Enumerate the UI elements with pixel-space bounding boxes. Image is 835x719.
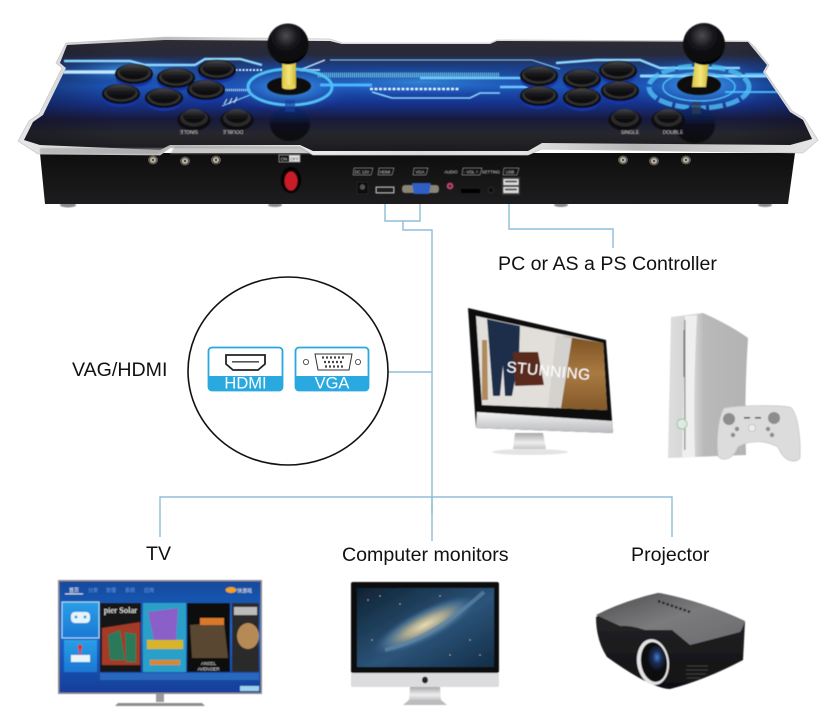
bezel shading on acrylic — [40, 146, 312, 154]
apple-style logo — [422, 677, 428, 683]
tv menu tiles — [62, 602, 99, 672]
button captions — [179, 128, 684, 136]
port labels: DC 12V — [355, 170, 370, 174]
label: VAG/HDMI: VAG/HDMI — [72, 359, 167, 381]
tv game covers — [100, 603, 259, 691]
left joystick — [267, 24, 311, 95]
VGA port card — [295, 348, 369, 392]
label: Computer monitors: Computer monitors — [342, 544, 509, 566]
monitor screen photo: STUNNING — [506, 359, 591, 384]
joystick rings — [248, 66, 749, 108]
tv frame — [58, 580, 262, 694]
monitor stand — [492, 433, 568, 455]
HDMI port card: HDMI — [224, 374, 267, 392]
projector body — [596, 593, 745, 689]
vent slots — [686, 666, 708, 678]
game controller — [717, 406, 800, 461]
power switch — [279, 155, 301, 193]
console body — [40, 153, 795, 204]
console feet — [60, 202, 772, 208]
port connectors — [357, 177, 520, 195]
monitor casing — [351, 582, 499, 673]
lens — [634, 637, 672, 687]
projector — [596, 593, 745, 689]
callout: HDMI and VGA ports circle — [188, 277, 388, 465]
HDMI port card — [208, 348, 283, 392]
acrylic top plate — [18, 37, 818, 155]
tv menu: 首页 — [69, 587, 79, 594]
port labels: USB — [506, 170, 515, 174]
port labels: SETTING — [482, 170, 500, 174]
button captions: SINGLE — [621, 130, 640, 136]
tv game covers: AVENGER — [197, 666, 220, 672]
console tower — [668, 313, 748, 458]
label: Projector: Projector — [631, 544, 710, 566]
VGA port card: VGA — [315, 374, 349, 392]
left action buttons — [102, 60, 254, 130]
printed blue surface — [24, 40, 812, 151]
label: TV: TV — [146, 543, 171, 565]
television — [58, 580, 262, 706]
circuit artwork — [60, 59, 790, 106]
control buttons — [658, 601, 690, 612]
button captions: SINGLE — [179, 128, 198, 134]
tv game covers: pier Solar — [104, 605, 137, 615]
tv game covers: ANSEL — [201, 661, 216, 666]
label: PC or AS a PS Controller: PC or AS a PS Controller — [498, 253, 717, 275]
port labels: HDMI — [380, 170, 390, 174]
power switch: ON — [281, 156, 287, 162]
port labels: VGA — [416, 170, 425, 174]
projector top — [596, 593, 745, 645]
joystick reflections — [270, 107, 310, 141]
tv menu: 分类 — [88, 587, 98, 594]
monitor: STUNNING display — [468, 308, 613, 455]
right action buttons — [520, 61, 684, 130]
tv screen — [60, 582, 260, 692]
power switch: OFF — [290, 156, 299, 162]
tv menu: 快游戏 — [237, 588, 252, 594]
tv menu: 应用 — [144, 587, 154, 594]
monitor stand — [403, 687, 447, 705]
port labels: - VOL + — [464, 170, 479, 174]
connector lines — [160, 195, 672, 541]
button captions: DOUBLE — [663, 130, 684, 136]
arcade console — [15, 23, 820, 208]
tv stand — [115, 694, 205, 706]
tv menu: 管理 — [106, 587, 116, 594]
galaxy wallpaper — [357, 582, 494, 668]
computer monitor — [351, 582, 499, 705]
monitor casing — [468, 308, 613, 433]
tv menu — [65, 587, 252, 594]
tv menu: 系统 — [125, 587, 135, 594]
button captions: DOUBLE — [222, 128, 243, 134]
game console and controller — [668, 313, 800, 461]
port labels — [353, 168, 519, 175]
monitor screen photo — [476, 316, 607, 410]
right joystick — [677, 23, 725, 95]
port labels: AUDIO — [444, 170, 458, 174]
front screws — [148, 156, 691, 166]
